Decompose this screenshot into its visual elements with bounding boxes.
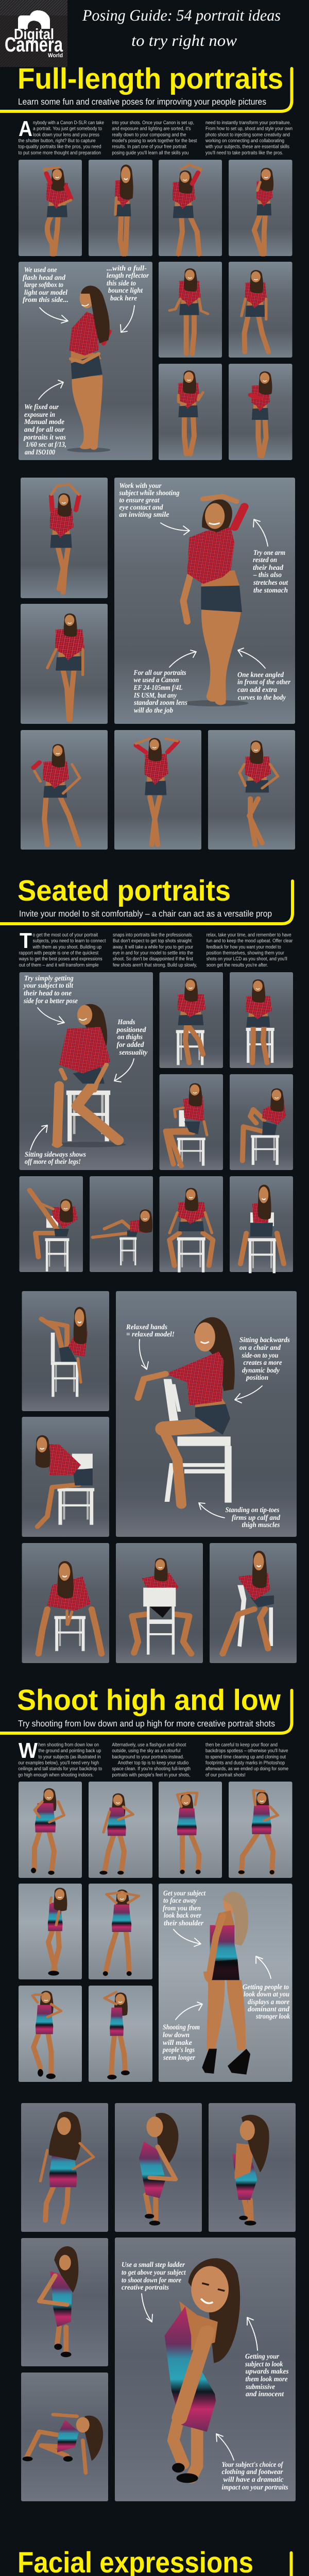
callout: relaxed hands xyxy=(126,1324,175,1338)
callout: flash head: large softbox to xyxy=(24,281,63,289)
photo: dress, side with hair xyxy=(19,1884,82,1979)
callout: look back: to face away xyxy=(163,1897,197,1905)
callout: clothing: will have a dramatic xyxy=(224,2476,284,2484)
callout: low down: Shooting from xyxy=(163,2024,200,2031)
arrows xyxy=(142,2294,258,2460)
callout: sitting sideways: Sitting sideways shows xyxy=(25,1151,87,1159)
callout: eye contact: eye contact and xyxy=(119,504,163,512)
photo: dress, hands on head xyxy=(89,1884,152,1979)
body text: intro xyxy=(19,116,293,156)
panel: shoot high and low xyxy=(0,1684,296,2501)
body text: seated intro: ways to get the best poses and expressions xyxy=(19,956,102,962)
callout: exposure: 1/60 sec at f/13, xyxy=(26,441,66,449)
body text: shoot intro: the ground and pointing back up xyxy=(39,1748,101,1754)
body text: seated intro: feedback for how you want your model to xyxy=(207,944,281,950)
body text: shoot intro: our examples below), you'll need very high xyxy=(18,1760,99,1766)
callout: knee: curves to the body xyxy=(238,694,286,702)
callout: look upwards: them look more xyxy=(245,2376,287,2383)
body text: seated intro: out of them – and it will transform simple xyxy=(19,962,99,968)
callout: arm on head: Try one arm xyxy=(253,549,285,557)
body text: shoot intro: go high enough when shooting indoors. xyxy=(18,1772,94,1778)
callout: flash head: We used one xyxy=(24,266,57,274)
body text: seated intro: But don't expect to get top shots straight xyxy=(113,938,192,944)
body text: seated intro: T xyxy=(20,928,32,953)
callout: lens xyxy=(133,669,188,715)
title xyxy=(82,6,281,49)
body text: intro: really down to your composing and the xyxy=(112,132,186,138)
callout: arm on head: their head xyxy=(253,564,284,572)
photo: high angle, looking over shoulder xyxy=(21,2238,108,2366)
body text: shoot intro: to spend time cleaning up and cloning out xyxy=(205,1754,286,1760)
callout: arm on head: rested on xyxy=(253,556,277,564)
body text: seated intro: soon get the results you're after. xyxy=(207,962,268,968)
body text: seated intro: subjects, you need to learn to connect xyxy=(33,938,106,944)
photo: arm stretched overhead xyxy=(159,160,222,256)
callout: step ladder xyxy=(122,2261,186,2292)
callout: knee: can add extra xyxy=(237,686,277,694)
callout: tilt head: your subject to tilt xyxy=(23,982,74,990)
callout: look back xyxy=(163,1890,206,1927)
photo: leg raised high xyxy=(20,1176,83,1272)
callout: low down xyxy=(162,2024,200,2062)
callout: look down: Getting people to xyxy=(243,1984,289,1991)
body text: intro: A xyxy=(19,116,32,141)
photo: hand to face, side on chair xyxy=(210,1543,297,1663)
callout: lens: For all our portraits xyxy=(133,669,186,677)
body text: shoot intro: portraits with people's feet in your shots, xyxy=(112,1772,190,1778)
body text: seated intro: relax, take your time, and remember to have xyxy=(207,933,291,938)
photo: hand on hip, arm on head xyxy=(19,160,82,256)
heading: Seated portraits xyxy=(0,874,293,924)
callout: hands on thighs: on thighs xyxy=(117,1033,143,1041)
callout: tilt head xyxy=(23,975,78,1005)
callout: reflector xyxy=(107,265,149,302)
logo: Digital Camera World xyxy=(0,0,67,67)
title: Posing Guide: 54 portrait ideas xyxy=(82,6,281,24)
callout: knee: One knee angled xyxy=(237,671,284,679)
callout: reflector: this side to xyxy=(107,280,136,287)
heading: Full-length portraits: Full-length portraits xyxy=(18,62,283,95)
body text: shoot intro: then be careful to keep your floor and xyxy=(205,1742,278,1748)
body text: seated intro: shoot. So don't be disappointed if the first xyxy=(113,956,193,962)
arrows xyxy=(30,1008,134,1150)
callout: look back: their shoulder xyxy=(164,1920,204,1927)
body text: shoot intro: outside, using the sky as a colourful xyxy=(112,1748,180,1754)
body text: seated intro: few shots aren't that strong. Build up slowly, xyxy=(113,962,197,968)
callout: clothing xyxy=(221,2461,288,2492)
body text: seated intro: away. It will take a while for you to get your xyxy=(113,944,194,950)
callout: arm on head xyxy=(253,549,288,595)
callout: flash head: from this side... xyxy=(23,296,68,304)
callout: knee: in front of the other xyxy=(237,679,290,686)
callout: look down xyxy=(243,1984,290,2021)
callout: sitting backwards: dynamic body xyxy=(242,1367,280,1375)
body text: seated intro: rapport with people is one of the quickest xyxy=(19,950,99,956)
photo: crossed legs, hands on hips xyxy=(208,730,295,850)
photo: big backwards on chair with callouts xyxy=(116,1291,297,1537)
body text: shoot intro: to your subjects (as illustrated in xyxy=(39,1754,101,1760)
photo: dress, hand on hair, low angle xyxy=(19,1986,82,2082)
callout: sitting backwards: creates a more xyxy=(243,1359,282,1367)
photo: dress, arm over head xyxy=(229,1782,293,1878)
panel: seated portraits xyxy=(0,874,297,1663)
logo: Digital Camera World: World xyxy=(48,53,63,59)
callout: step ladder: to shoot down for more xyxy=(122,2277,181,2284)
body text: shoot intro: Alternatively, use a flashgun and shoot xyxy=(112,1742,186,1748)
body text: intro: you'll need to take portraits like the pros. xyxy=(205,150,283,156)
callout: arm on head: stretches out xyxy=(253,579,288,587)
photo: leaning forward on chair xyxy=(22,1417,109,1537)
callout: exposure: Manual mode xyxy=(24,418,64,426)
callout: low down: low down xyxy=(163,2031,190,2039)
heading: Full-length portraits: Learn some fun and creative poses for improving your people pictures xyxy=(18,97,266,107)
callout: hands on thighs: positioned xyxy=(116,1026,146,1034)
callout: arm on head: – this also xyxy=(253,571,282,579)
callout: look upwards: Getting your xyxy=(245,2353,279,2361)
body text: intro: the shutter button, right? But to capture xyxy=(19,138,96,144)
body text: shoot intro: of our portrait shots! xyxy=(205,1772,246,1778)
callout: sitting backwards xyxy=(239,1336,290,1382)
body text: intro: with your subjects, these are essential skills xyxy=(205,144,289,150)
callout: exposure: We fixed our xyxy=(24,403,59,411)
callout: tilt head: their head to one xyxy=(24,990,72,997)
callout: eye contact xyxy=(119,482,179,519)
photo: looking back over shoulder xyxy=(89,160,152,256)
body text: shoot intro: afterwards, as we ended up doing for some xyxy=(205,1766,288,1772)
callout: step ladder: creative portraits xyxy=(122,2284,169,2292)
callout: sitting backwards: on a chair and xyxy=(239,1344,281,1352)
photo: arms folded xyxy=(229,364,293,460)
photo: chin on hands xyxy=(230,972,293,1068)
callout: look back: Get your subject xyxy=(163,1890,206,1897)
logo: Digital Camera World: Camera xyxy=(5,33,63,56)
callout: look down: stronger look xyxy=(255,2013,290,2021)
photo: legs apart xyxy=(229,262,293,358)
photo: cross-legged on chair xyxy=(160,972,223,1068)
photo: hand at waist xyxy=(159,364,222,460)
body text: intro: a portrait. You just get somebody to xyxy=(33,126,102,132)
callout: relaxed hands: Relaxed hands xyxy=(126,1324,168,1331)
photo: reclining across chair xyxy=(90,1176,153,1272)
body text: intro: working on connecting and collaborating xyxy=(205,138,284,144)
callout: look upwards: submissive xyxy=(245,2383,275,2391)
photo: straddling chair, hands on knees xyxy=(160,1176,223,1273)
photo: big back view with lighting callouts xyxy=(19,262,152,460)
callout: low down: will make xyxy=(163,2039,192,2047)
callout: look down: displays a more xyxy=(248,1998,289,2006)
arrows xyxy=(161,519,268,668)
arrows xyxy=(140,1340,262,1518)
callout: sitting backwards: side-on to you xyxy=(242,1352,279,1360)
callout: flash head: flash head and xyxy=(23,274,66,282)
photo: straddling chair back xyxy=(116,1543,203,1663)
photo: back view on chair xyxy=(230,1176,293,1273)
callout: look upwards xyxy=(245,2353,289,2398)
body text: intro: to put some more thought and preparation xyxy=(19,150,101,156)
callout: exposure: exposure in xyxy=(24,411,55,419)
body text: seated intro: fun and to keep the mood upbeat. Offer clear xyxy=(207,938,293,944)
body text: intro: From how to set up, shoot and style your own xyxy=(205,126,293,132)
callout: sitting sideways: off more of their legs! xyxy=(25,1158,81,1166)
callout: look upwards: and innocent xyxy=(246,2391,284,2398)
body text: shoot intro xyxy=(18,1738,288,1778)
heading: Shoot high and low: Try shooting from low down and up high for more creative portrait shots xyxy=(18,1719,275,1728)
photo: high angle, smiling up xyxy=(115,2103,202,2232)
callout: lens: will do the job xyxy=(134,707,173,715)
callout: lens: we used a Canon xyxy=(134,676,179,684)
callout: look upwards: upwards makes xyxy=(245,2368,289,2376)
photo: big arm on head with callouts xyxy=(114,478,295,724)
photo: both arms up xyxy=(21,478,108,598)
callout: low down: seem longer xyxy=(163,2054,195,2062)
callout: step ladder: Use a small step ladder xyxy=(122,2261,185,2269)
callout: lens: EF 24-105mm f/4L xyxy=(133,684,182,692)
body text: seated intro xyxy=(19,928,293,968)
photo: dress, hands on hips xyxy=(19,1782,82,1878)
heading: Seated portraits: Invite your model to sit comfortably – a chair can act as a versatile prop xyxy=(19,909,272,919)
callout: reflector: bounce light xyxy=(108,287,143,295)
photo: walking pose xyxy=(21,604,108,724)
callout: look back: from you then xyxy=(163,1905,201,1912)
body text: shoot intro: ceilings and tall stands for your backdrop to xyxy=(18,1766,102,1772)
callout: tilt head: Try simply getting xyxy=(24,975,74,982)
callout: knee xyxy=(237,671,290,702)
photo: hands behind head xyxy=(114,730,201,850)
heading: Shoot high and low xyxy=(0,1684,291,1733)
photo: leaning on knees xyxy=(22,1543,109,1663)
callout: eye contact: to ensure great xyxy=(119,497,160,504)
callout: tip-toes: firms up calf and xyxy=(232,1514,281,1522)
callout: eye contact: Work with your xyxy=(119,482,162,490)
callout: exposure: portraits it was xyxy=(23,434,66,442)
panel: full-length portraits xyxy=(0,62,295,850)
photo: high angle, hand on hip xyxy=(21,2103,108,2232)
body text: shoot intro: footprints and dusty marks in Photoshop xyxy=(205,1760,285,1766)
photo: dress, side back view xyxy=(89,1986,152,2082)
body text: shoot intro: background to your portraits instead. xyxy=(112,1754,184,1760)
body text: intro: top-quality portraits like the pros, you need xyxy=(19,144,101,150)
callout: lens: IS USM, but any xyxy=(133,692,177,700)
title: to try right now xyxy=(131,31,237,49)
photo: feet on chair back xyxy=(22,1291,109,1411)
body text: intro: need to instantly transform your portraiture. xyxy=(205,120,291,126)
callout: clothing: Your subject's choice of xyxy=(221,2461,284,2469)
callout: sitting backwards: Sitting backwards xyxy=(239,1336,290,1344)
arrows xyxy=(39,306,134,399)
body text: intro: results. In part one of your free portrait xyxy=(112,144,186,150)
callout: tip-toes xyxy=(226,1506,281,1529)
photo: big high angle with callouts xyxy=(115,2238,296,2501)
body text: seated intro: position themselves, showing them your xyxy=(207,950,284,956)
body text: seated intro: o get the most out of your portrait xyxy=(33,933,98,938)
callout: tilt head: side for a better pose xyxy=(23,997,78,1005)
body text: intro: photo shoot to injecting some creativity and xyxy=(205,132,290,138)
photo: crouching, high angle xyxy=(21,2372,108,2501)
body text: intro: into your shots. Once your Canon is set up, xyxy=(112,120,194,126)
body text: shoot intro: Another top tip is to keep your studio xyxy=(118,1760,188,1766)
heading: Full-length portraits xyxy=(0,62,291,111)
photo: big seated sideways with callouts xyxy=(20,972,153,1170)
photo: arms out, facing camera xyxy=(159,262,222,358)
photo: big low-angle dress with callouts xyxy=(159,1884,293,2082)
callout: sitting sideways xyxy=(25,1151,87,1166)
callout: flash head xyxy=(23,266,68,304)
photo: side on, arm on chair back xyxy=(160,1074,223,1170)
callout: lens: standard zoom lens xyxy=(133,699,188,707)
callout: exposure: and for all our xyxy=(24,426,64,434)
callout: flash head: light our model xyxy=(24,289,67,297)
callout: reflector: back here xyxy=(110,295,137,302)
body text: seated intro: eye in and for your model to settle into the xyxy=(113,950,193,956)
photo: dress, one hand on hip xyxy=(89,1782,152,1878)
body text: intro: model's posing to work together for the best xyxy=(112,138,197,144)
body text: shoot intro: W xyxy=(19,1738,38,1762)
callout: step ladder: to get above your subject xyxy=(122,2269,186,2277)
callout: eye contact: an inviting smile xyxy=(119,511,169,519)
body text: seated intro: with them as you shoot. Building up xyxy=(32,944,101,950)
logo: Digital Camera World: Digital xyxy=(14,26,54,43)
callout: look down: look down at you xyxy=(244,1991,289,1998)
callout: tip-toes: Standing on tip-toes xyxy=(226,1506,280,1514)
arrows xyxy=(174,1929,271,2020)
body text: intro: look down your lens and you press xyxy=(33,132,99,138)
callout: look upwards: subject to look xyxy=(245,2361,283,2368)
callout: look down: dominant and xyxy=(248,2006,290,2013)
body text: shoot intro: hen shooting from down low on xyxy=(39,1742,99,1748)
callout: hands on thighs: sensuality xyxy=(119,1049,148,1057)
callout: clothing: clothing and footwear xyxy=(221,2468,283,2476)
body text: intro: posing guide you'll learn all the skills you xyxy=(112,150,188,156)
photo: side pose, hand at chin xyxy=(229,160,293,256)
body text: shoot intro: backdrops spotless – otherwise you'll have xyxy=(205,1748,288,1754)
photo: knee raised on chair xyxy=(230,1074,293,1170)
callout: hands on thighs: Hands xyxy=(117,1019,135,1026)
callout: clothing: impact on your portraits xyxy=(221,2484,288,2492)
body text: intro: nybody with a Canon D-SLR can take xyxy=(33,120,104,126)
body text: seated intro: snaps into portraits like the professionals. xyxy=(113,933,193,938)
callout: low down: people's legs xyxy=(162,2046,195,2054)
body text: shoot intro: space clean. If you're shooting full-length xyxy=(112,1766,191,1772)
callout: exposure xyxy=(23,403,66,456)
callout: eye contact: subject while shooting xyxy=(119,489,179,497)
callout: tip-toes: thigh muscles xyxy=(242,1521,280,1529)
heading: Seated portraits: Seated portraits xyxy=(18,874,231,907)
body text: seated intro: shots on your LCD as you shoot, and you'll xyxy=(207,956,287,962)
callout: hands on thighs xyxy=(116,1019,148,1057)
callout: relaxed hands: = relaxed model! xyxy=(126,1331,175,1338)
photo: hands on hips, leaning xyxy=(21,730,108,850)
callout: arm on head: the stomach xyxy=(253,587,288,595)
callout: reflector: ...with a full- xyxy=(107,265,147,273)
callout: look back: look back over xyxy=(164,1912,201,1920)
photo: high angle, hand on shoulder xyxy=(209,2103,296,2232)
callout: sitting backwards: position xyxy=(246,1374,268,1382)
body text: intro: and exposure and lighting are sorted, it's xyxy=(112,126,191,132)
panel: facial expressions xyxy=(0,2546,291,2576)
callout: exposure: and ISO100 xyxy=(25,449,55,456)
callout: reflector: length reflector xyxy=(107,272,149,280)
callout: hands on thighs: for added xyxy=(116,1041,144,1049)
heading: Shoot high and low: Shoot high and low xyxy=(17,1684,281,1717)
photo: dress, arms up xyxy=(159,1782,222,1878)
